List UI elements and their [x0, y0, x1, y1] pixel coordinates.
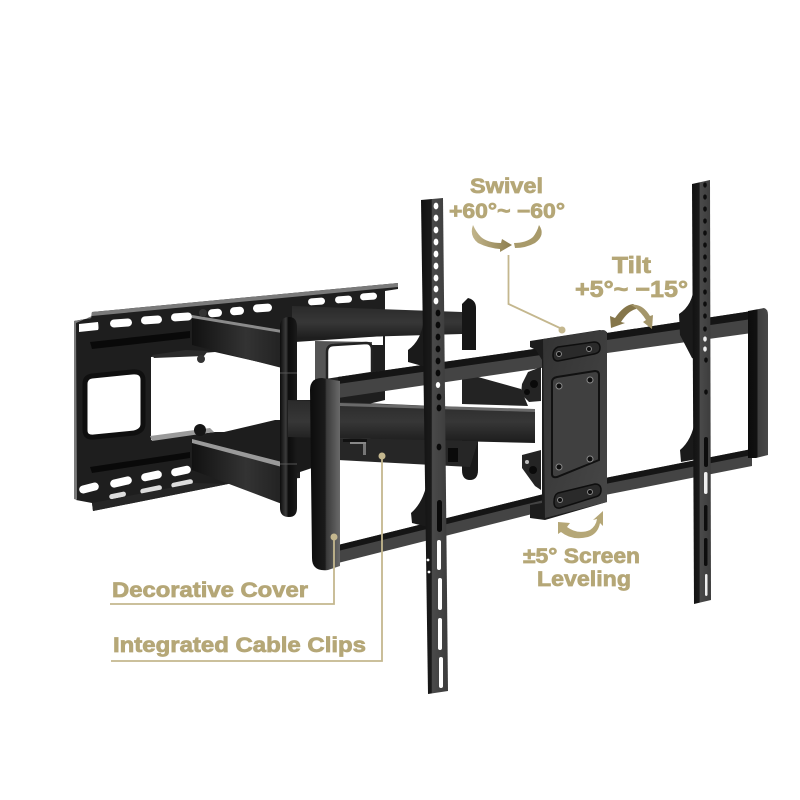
recessed panel [552, 371, 599, 477]
wall plate cutout [151, 352, 285, 440]
TV bracket lower rail [338, 493, 548, 563]
label: screen leveling: ±5° Screen [523, 545, 640, 568]
label: screen leveling: Leveling [537, 568, 631, 591]
icon: tilt arrow [610, 304, 653, 329]
label: screen leveling [523, 545, 640, 591]
decorative cover left [310, 378, 340, 570]
elbow pivot pin [280, 317, 297, 517]
upper adjustment slot [553, 342, 600, 361]
swivel leader line [508, 255, 566, 334]
decorative cover right [748, 308, 768, 458]
lower swing arm [92, 420, 312, 511]
swivel hinge lower [522, 450, 541, 490]
stiffening ribs [90, 331, 190, 349]
label: swivel: Swivel [470, 175, 543, 198]
label: swivel [449, 175, 565, 223]
lower adjustment slot [554, 484, 601, 508]
label: decorative cover: Decorative Cover [112, 579, 308, 602]
centre mounting plate [530, 330, 607, 520]
TV bracket upper rail right [600, 311, 752, 354]
wall plate window [85, 372, 143, 437]
icon: leveling arrow [558, 511, 603, 538]
left vertical strip [408, 198, 448, 694]
wall plate [74, 283, 398, 511]
icon: swivel arrow [472, 225, 542, 252]
upper swing arm [152, 309, 282, 368]
top slots [78, 292, 377, 500]
right vertical strip [679, 180, 711, 604]
lower pivot stud [462, 440, 478, 480]
cable clips leader line [111, 452, 386, 661]
bolts [556, 346, 593, 502]
swivel hinge upper [521, 367, 541, 402]
decorative cover leader line [110, 534, 338, 604]
wall plate right opening [295, 336, 383, 400]
label: tilt: +5°~ −15° [575, 276, 688, 302]
upper rear arm [292, 298, 476, 350]
label: integrated cable clips: Integrated Cable Clips [113, 634, 366, 657]
integrated cable clips tray [338, 438, 478, 467]
label: swivel: +60°~ −60° [449, 200, 565, 223]
TV bracket lower rail right [600, 449, 752, 496]
label: tilt: Tilt [612, 252, 651, 278]
rear link under arm [462, 377, 528, 406]
TV bracket upper rail [338, 347, 548, 398]
main extension arm [288, 400, 535, 443]
label: tilt [575, 252, 688, 302]
